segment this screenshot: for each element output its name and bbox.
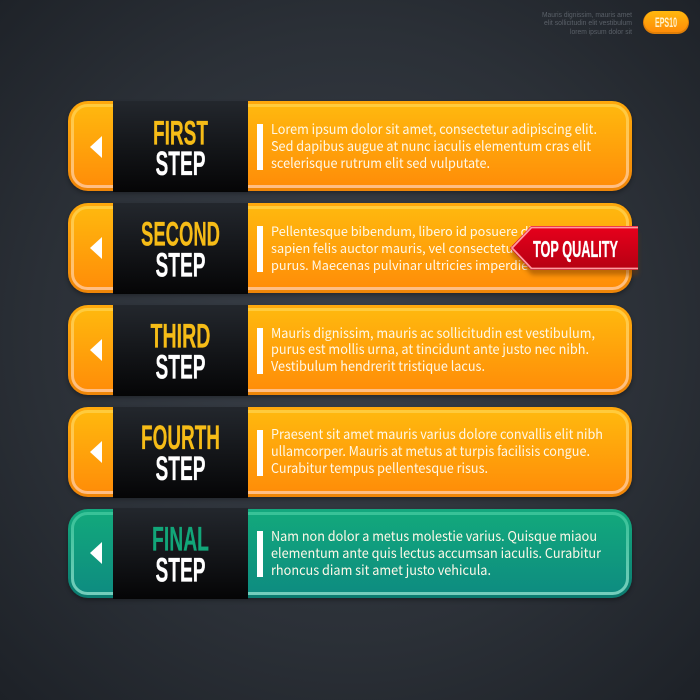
top note text: lorem ipsum dolor sit — [570, 29, 632, 36]
body text — [271, 525, 602, 579]
panel: first step — [68, 101, 632, 193]
heading: THIRD — [150, 318, 210, 356]
top note text — [542, 12, 632, 36]
body text: sapien felis auctor mauris, vel consectetur nunc — [271, 238, 551, 257]
icon: left arrow — [90, 441, 102, 463]
heading: STEP — [156, 348, 206, 386]
heading: STEP — [156, 450, 206, 488]
body text: Lorem ipsum dolor sit amet, consectetur adipiscing elit. — [271, 118, 597, 138]
body text: purus. Maecenas pulvinar ultricies imperdiet elit. — [271, 255, 558, 274]
icon: left arrow — [90, 542, 102, 564]
callout: top quality ribbon: TOP QUALITY — [533, 236, 618, 262]
heading — [141, 216, 220, 284]
vertical bar — [257, 328, 263, 374]
body text: Pellentesque bibendum, libero id posuere dictum, — [271, 221, 566, 240]
EPS10 badge — [643, 11, 689, 34]
heading: SECOND — [141, 216, 220, 254]
callout: top quality ribbon — [510, 226, 638, 275]
body text: elementum ante quis lectus accumsan iaculis. Curabitur — [271, 542, 602, 562]
icon: left arrow — [90, 339, 102, 361]
heading: FINAL — [152, 520, 209, 558]
body text: ullamcorper. Mauris at metus at turpis facilisis congue. — [271, 440, 590, 460]
body text: Vestibulum hendrerit tristique lacus. — [271, 355, 485, 375]
black label — [113, 508, 248, 599]
body text: Curabitur tempus pellentesque risus. — [271, 457, 488, 477]
body text: Praesent sit amet mauris varius dolore convallis elit nibh — [271, 423, 603, 443]
panel: final step — [68, 508, 632, 600]
vertical bar — [257, 226, 263, 272]
panel: third step — [68, 305, 632, 397]
heading: STEP — [156, 145, 206, 183]
panel: second step — [68, 203, 632, 295]
heading — [152, 520, 209, 590]
heading — [153, 114, 208, 183]
panel: fourth step — [68, 407, 632, 499]
black label — [113, 407, 248, 498]
heading: FIRST — [153, 114, 208, 152]
heading: FOURTH — [141, 419, 220, 457]
body text — [271, 221, 566, 274]
body text: Nam non dolor a metus molestie varius. Quisque miaou — [271, 525, 597, 545]
icon: left arrow — [90, 237, 102, 259]
top note text: elit sollicitudin elit vestibulum — [544, 20, 632, 27]
EPS10 badge: EPS10 — [655, 14, 677, 30]
body text: Mauris dignissim, mauris ac sollicitudin est vestibulum, — [271, 322, 595, 342]
top note text: Mauris dignissim, mauris amet — [542, 12, 632, 19]
heading: STEP — [156, 552, 206, 590]
black label — [113, 203, 248, 294]
body text — [271, 322, 595, 375]
body text: purus est mollis urna, at tincidunt ante justo nec nibh. — [271, 338, 589, 358]
body text — [271, 118, 597, 172]
black label — [113, 305, 248, 396]
body text: scelerisque rutrum elit sed vulputate. — [271, 152, 490, 172]
body text: rhoncus diam sit amet justo vehicula. — [271, 559, 491, 579]
heading: STEP — [156, 246, 206, 284]
heading — [150, 318, 210, 386]
vertical bar — [257, 531, 263, 577]
body text — [271, 423, 603, 477]
black label — [113, 101, 248, 192]
vertical bar — [257, 124, 263, 170]
icon: left arrow — [90, 136, 102, 158]
vertical bar — [257, 430, 263, 476]
heading — [141, 419, 220, 488]
body text: Sed dapibus augue at nunc iaculis elementum cras elit — [271, 135, 591, 155]
